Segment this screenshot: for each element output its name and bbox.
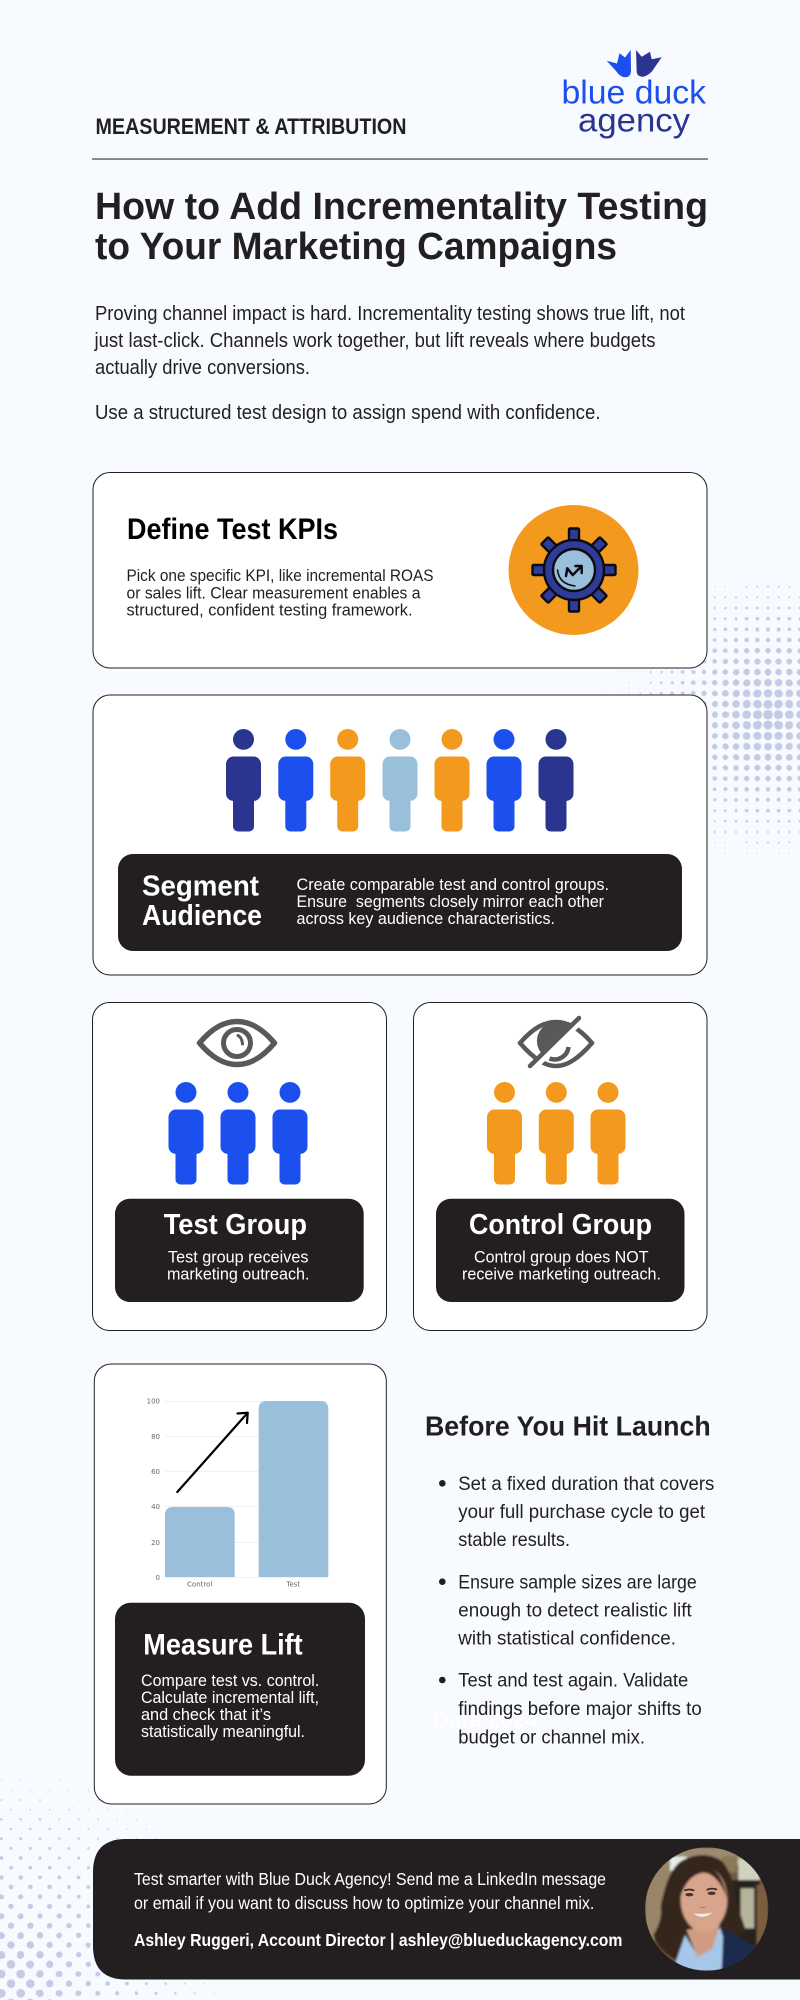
bar chart: control vs test: 20 — [151, 1539, 160, 1547]
dark bar: segment audience — [118, 854, 682, 951]
title: to Your Marketing Campaigns — [95, 226, 617, 268]
halftone dots: bottom left — [0, 1729, 264, 2000]
panel: measure lift — [94, 1364, 386, 1804]
panel: control group — [414, 1002, 707, 1330]
bullet 2: enough to detect realistic lift — [458, 1599, 692, 1621]
text: segment description: Create comparable test and control groups. — [296, 875, 609, 894]
bullet 3 — [439, 1670, 702, 1748]
title: How to Add Incrementality Testing — [95, 186, 708, 228]
people: control group — [487, 1082, 626, 1184]
logo wordmark: blue duck — [562, 73, 707, 110]
intro text — [94, 303, 685, 424]
text: segment description: Ensure segments closely mirror each other — [296, 892, 604, 911]
halftone dots: right — [606, 553, 800, 877]
heading: control group: Control Group — [469, 1209, 652, 1241]
arrow: lift — [177, 1413, 248, 1492]
bar chart: control vs test — [147, 1398, 328, 1588]
text: control group description — [462, 1247, 661, 1283]
dark box: control group — [436, 1199, 684, 1302]
bar chart: control vs test: 40 — [151, 1503, 160, 1511]
heading: segment audience — [142, 870, 262, 932]
bullet 1: Set a fixed duration that covers — [458, 1473, 715, 1495]
ghost text: data 2024: Data 2024 — [432, 1709, 538, 1732]
icon: eye — [200, 1022, 274, 1064]
bullet 1 — [439, 1473, 715, 1551]
text: KPI description: Pick one specific KPI, like incremental ROAS — [126, 566, 434, 585]
icon: eye with slash — [520, 1017, 592, 1066]
footer text: Test smarter with Blue Duck Agency! Send me a LinkedIn message — [134, 1869, 606, 1889]
footer text: or email if you want to discuss how to optimize your channel mix. — [134, 1893, 594, 1913]
heading: define test KPIs: Define Test KPIs — [127, 513, 338, 546]
text: KPI description — [126, 566, 434, 620]
text: control group description: receive marketing outreach. — [462, 1264, 661, 1283]
bullet 2 — [439, 1571, 697, 1649]
dark box: test group — [115, 1199, 364, 1302]
panel: define test KPIs — [93, 472, 707, 668]
text: segment description — [296, 875, 609, 928]
bullet 1: stable results. — [458, 1529, 570, 1551]
bar chart: control vs test: 80 — [151, 1433, 160, 1441]
panel: test group — [92, 1002, 386, 1330]
text: segment description: across key audience characteristics. — [296, 909, 555, 928]
text: test group description: Test group receives — [168, 1247, 308, 1266]
icon: gear with trend arrow — [508, 505, 638, 635]
icon: duck feet — [607, 50, 662, 77]
footer text: Ashley Ruggeri, Account Director | ashley@blueduckagency.com — [134, 1930, 622, 1950]
bullet 2: with statistical confidence. — [457, 1627, 676, 1649]
intro text: Proving channel impact is hard. Incrementality testing shows true lift, not — [95, 303, 685, 325]
bar chart: control vs test: 0 — [156, 1574, 160, 1582]
intro text: just last-click. Channels work together, but lift reveals where budgets — [94, 330, 656, 352]
bar chart: control vs test: Control — [187, 1580, 212, 1588]
bullet 3: budget or channel mix. — [458, 1726, 645, 1748]
people row — [226, 729, 574, 832]
heading: before you hit launch: Before You Hit Launch — [425, 1411, 711, 1442]
logo wordmark — [562, 73, 707, 138]
intro text: actually drive conversions. — [95, 357, 310, 379]
panel: segment audience — [93, 695, 707, 975]
logo wordmark: agency — [578, 102, 691, 138]
text: measure lift description: Compare test vs. control. — [141, 1671, 319, 1690]
people: test group — [168, 1082, 308, 1184]
text: KPI description: or sales lift. Clear measurement enables a — [126, 584, 421, 602]
footer text — [134, 1869, 622, 1950]
text: measure lift description: statistically meaningful. — [141, 1722, 305, 1741]
bar chart: control vs test: 60 — [151, 1468, 160, 1476]
bullet 2: Ensure sample sizes are large — [458, 1571, 697, 1593]
bar chart: control vs test: 100 — [147, 1398, 160, 1406]
title — [95, 186, 708, 268]
text: KPI description: structured, confident testing framework. — [126, 600, 412, 620]
heading: segment audience: Audience — [142, 900, 262, 932]
bar chart: control vs test: Test — [285, 1580, 300, 1588]
bullet 3: findings before major shifts to — [458, 1698, 702, 1720]
text: control group description: Control group does NOT — [474, 1247, 648, 1266]
text: test group description — [167, 1247, 310, 1283]
bullet 1: your full purchase cycle to get — [458, 1501, 706, 1523]
checklist — [439, 1473, 715, 1748]
heading: segment audience: Segment — [142, 870, 259, 902]
dark box: measure lift — [115, 1603, 365, 1776]
category label: MEASUREMENT & ATTRIBUTION — [96, 114, 406, 139]
text: measure lift description — [141, 1671, 319, 1741]
intro text: Use a structured test design to assign spend with confidence. — [95, 402, 600, 424]
text: measure lift description: Calculate incremental lift, — [141, 1688, 319, 1707]
heading: test group: Test Group — [164, 1209, 307, 1241]
photo: Ashley Ruggeri portrait — [645, 1847, 768, 1972]
text: measure lift description: and check that it’s — [141, 1705, 271, 1724]
bullet 3: Test and test again. Validate — [458, 1670, 688, 1692]
logo: blue duck agency — [562, 50, 707, 138]
footer call to action — [93, 1839, 800, 1980]
heading: measure lift: Measure Lift — [143, 1628, 303, 1661]
text: test group description: marketing outreach. — [167, 1264, 310, 1283]
